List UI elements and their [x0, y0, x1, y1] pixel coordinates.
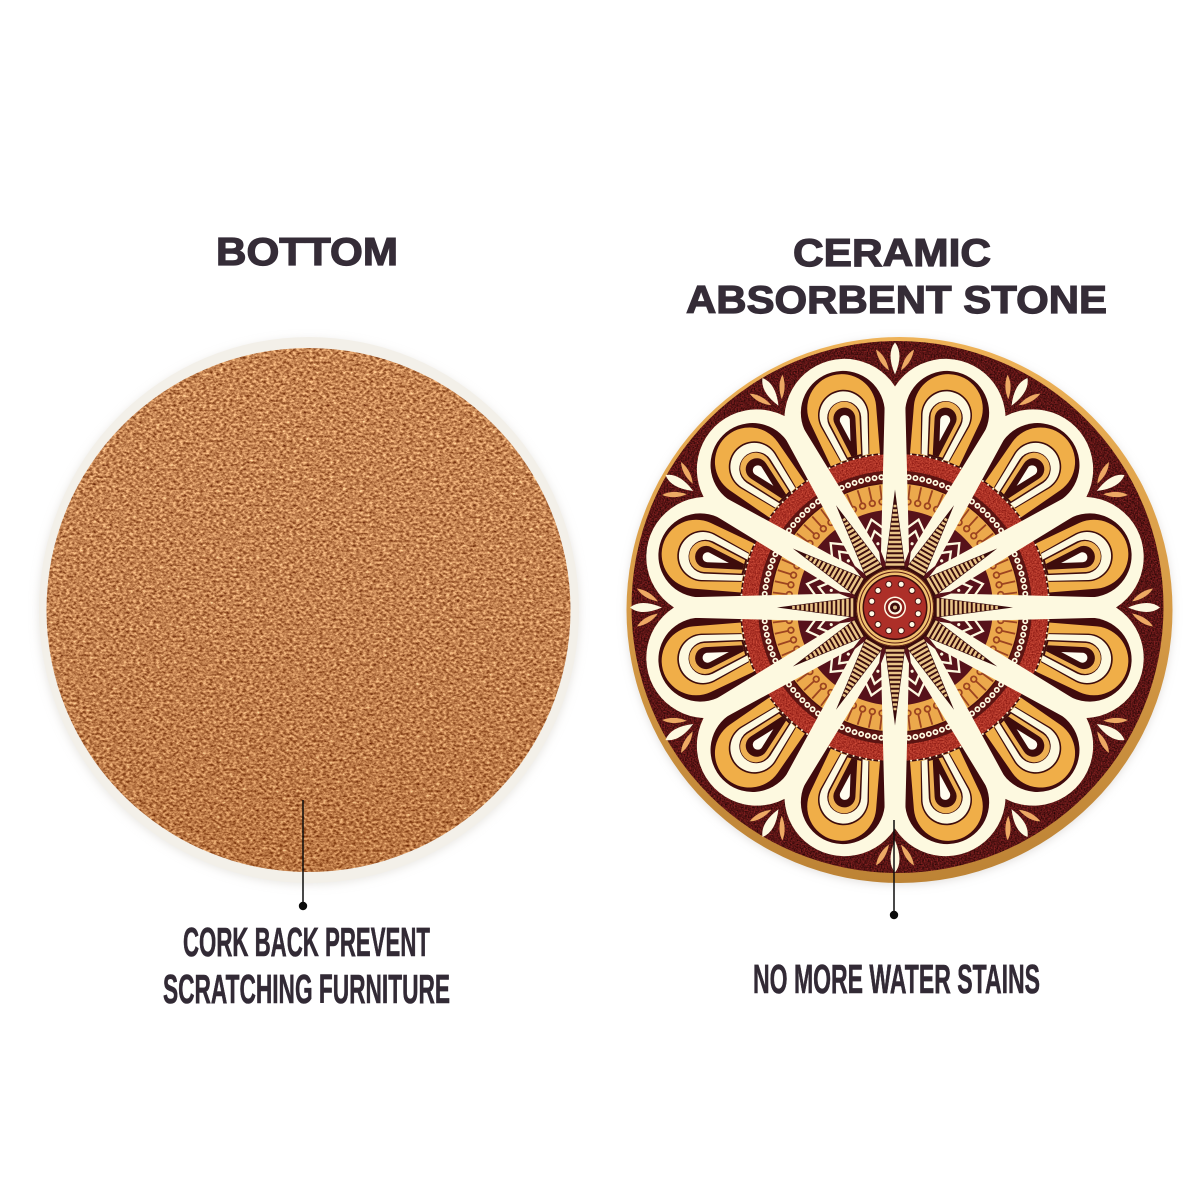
mandala [630, 342, 1160, 872]
ceramic shadow [628, 340, 1172, 884]
heading: ceramic absorbent stone: CERAMIC [793, 232, 991, 275]
text: cork back caption: CORK BACK PREVENT [183, 919, 430, 965]
text: cork back caption [163, 919, 450, 1012]
heading: bottom: BOTTOM [216, 231, 398, 274]
star spikes [777, 490, 1013, 726]
coaster shadow [39, 340, 579, 884]
callout line: water stains [890, 820, 898, 919]
gold rim [626, 337, 1172, 883]
maroon ground [632, 341, 1164, 873]
leaf accents [630, 342, 1160, 872]
cream petal outlines [633, 345, 1157, 870]
panel: bottom of coaster [39, 337, 579, 884]
cork shading [46, 348, 570, 872]
concentric rings [740, 452, 1050, 762]
callout line: cork back [299, 800, 307, 910]
key motifs [771, 484, 1019, 731]
heading: ceramic absorbent stone [686, 232, 1107, 322]
cream spokes [680, 392, 1110, 822]
heading: ceramic absorbent stone: ABSORBENT STONE [686, 279, 1107, 322]
petal interiors [649, 361, 1141, 854]
ceramic rim [39, 337, 579, 883]
text: cork back caption: SCRATCHING FURNITURE [163, 966, 450, 1012]
centre medallion [856, 568, 934, 646]
chevron motifs [805, 517, 985, 698]
panel: ceramic mandala coaster [626, 337, 1172, 884]
cork surface [46, 348, 570, 872]
